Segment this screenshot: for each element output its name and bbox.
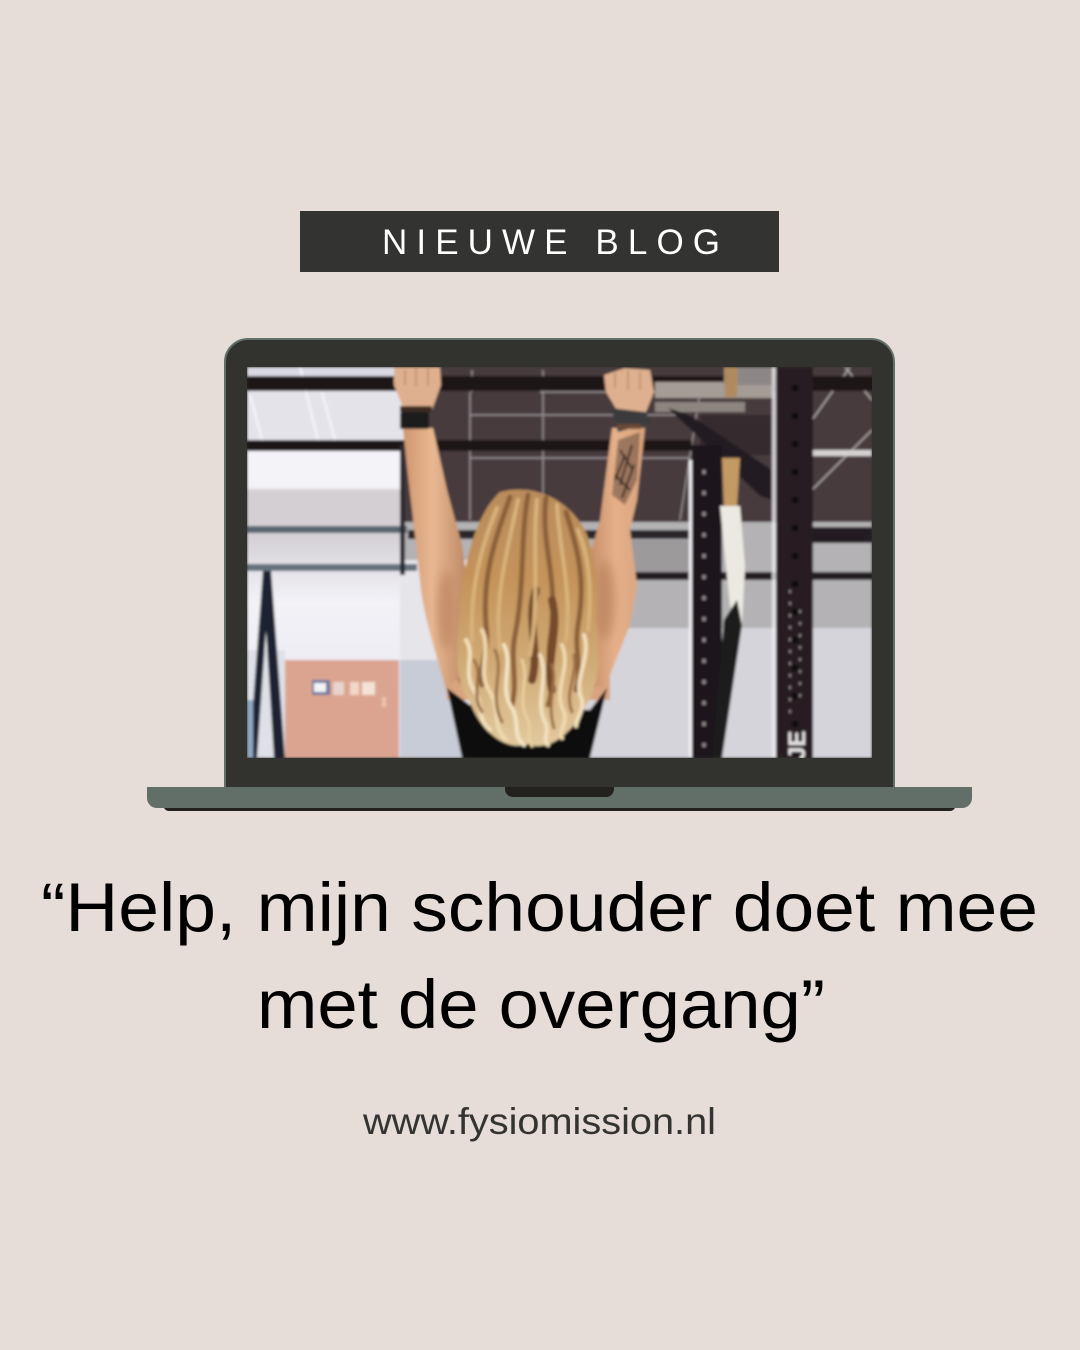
rack holes: [792, 385, 798, 760]
wristbands: [400, 406, 432, 412]
pink wall: [285, 660, 399, 758]
laptop illustration: [147, 339, 972, 811]
black top: [447, 688, 607, 758]
sign: [312, 680, 330, 695]
badge: NIEUWE BLOG: NIEUWE BLOG: [382, 223, 720, 262]
arm right: [585, 428, 645, 690]
laptop base: [147, 787, 972, 808]
horizontal bars: [247, 376, 887, 391]
photo: woman hanging from pull-up bar: [247, 367, 887, 760]
rope and strap: [724, 367, 738, 397]
headline: met de overgang”: [257, 966, 825, 1043]
badge: NIEUWE BLOG: [300, 211, 779, 272]
hair: [457, 490, 599, 746]
base shadow strip: [164, 808, 955, 811]
mid strands: [472, 500, 590, 655]
arm left: [403, 428, 470, 690]
tattoo: [612, 432, 640, 505]
trackpad notch: [505, 787, 614, 797]
light curls: [466, 640, 490, 730]
logo on post: JE: [784, 731, 811, 760]
dark strands: [481, 495, 581, 705]
torso: [445, 676, 612, 702]
machinery on right: [655, 382, 773, 398]
website url: www.fysiomission.nl: [362, 1101, 716, 1142]
hands: [394, 367, 441, 410]
ceiling left panels: [398, 400, 406, 443]
muscle shading: [438, 570, 456, 650]
laptop screen frame: [225, 339, 894, 788]
ceiling grid: [470, 370, 700, 520]
gym rack posts: [692, 445, 722, 758]
headline: “Help, mijn schouder doet mee: [41, 869, 1038, 946]
headline: [41, 869, 1038, 1043]
resistance bands: [249, 570, 285, 758]
